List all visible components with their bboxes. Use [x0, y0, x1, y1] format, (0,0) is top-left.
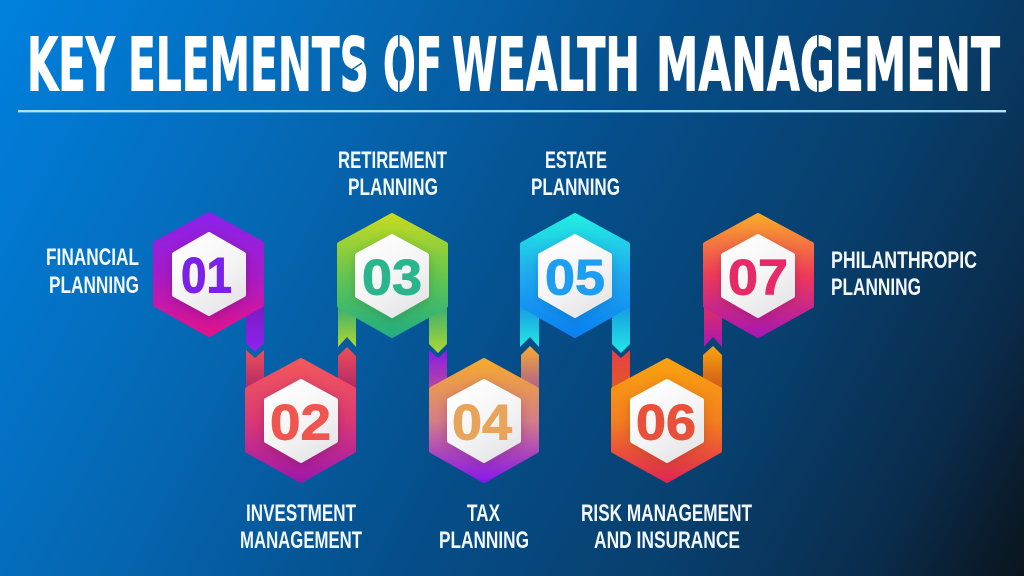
title: ELEMENTS	[128, 22, 369, 108]
hexagon 01	[155, 214, 262, 335]
label: estate planning: ESTATE	[545, 147, 607, 174]
label: tax planning	[439, 500, 529, 554]
title: OF	[383, 22, 442, 108]
label: investment management	[240, 500, 362, 554]
title: WEALTH	[452, 22, 640, 108]
label: financial planning: PLANNING	[49, 272, 139, 299]
ribbon: 02 to 03 connector	[338, 300, 356, 390]
hexagon 07: 07	[728, 250, 788, 306]
ribbon: 03 to 04 connector	[429, 300, 447, 390]
hexagon 06	[613, 360, 720, 481]
ribbon: 04 to 05 connector	[520, 300, 539, 392]
ribbon: 01 to 02 connector	[246, 305, 264, 390]
label: risk management and insurance	[581, 500, 752, 554]
label: investment management: INVESTMENT	[246, 500, 356, 527]
label: retirement planning: PLANNING	[348, 174, 438, 201]
hexagon 04: 04	[452, 394, 512, 450]
hexagon 05: 05	[545, 250, 605, 306]
title underline	[18, 110, 1006, 112]
label: investment management: MANAGEMENT	[240, 527, 362, 554]
title: KEY	[27, 22, 116, 108]
label: philanthropic planning: PLANNING	[831, 274, 921, 301]
hexagon 02	[247, 360, 354, 481]
label: philanthropic planning	[831, 247, 977, 301]
hexagon 03	[339, 215, 446, 336]
label: tax planning: TAX	[467, 500, 500, 527]
hexagon 07	[705, 215, 812, 336]
label: tax planning: PLANNING	[439, 527, 529, 554]
label: retirement planning: RETIREMENT	[338, 147, 447, 174]
label: estate planning	[531, 147, 620, 201]
hexagon 04	[431, 360, 537, 481]
label: risk management and insurance: RISK MANAGEMENT	[581, 500, 752, 527]
hexagon 03: 03	[362, 250, 422, 306]
hexagon 06: 06	[636, 394, 696, 450]
ribbon: 05 to 06 connector	[612, 300, 630, 392]
label: risk management and insurance: AND INSURANCE	[594, 527, 740, 554]
label: estate planning: PLANNING	[531, 174, 620, 201]
label: financial planning	[46, 244, 139, 299]
title	[27, 22, 1000, 108]
label: retirement planning	[338, 147, 447, 201]
hexagon 02: 02	[270, 394, 331, 450]
label: financial planning: FINANCIAL	[46, 244, 139, 271]
hexagon 01: 01	[181, 248, 232, 304]
ribbon: 06 to 07 connector	[703, 300, 722, 392]
hexagon 05	[522, 215, 628, 336]
